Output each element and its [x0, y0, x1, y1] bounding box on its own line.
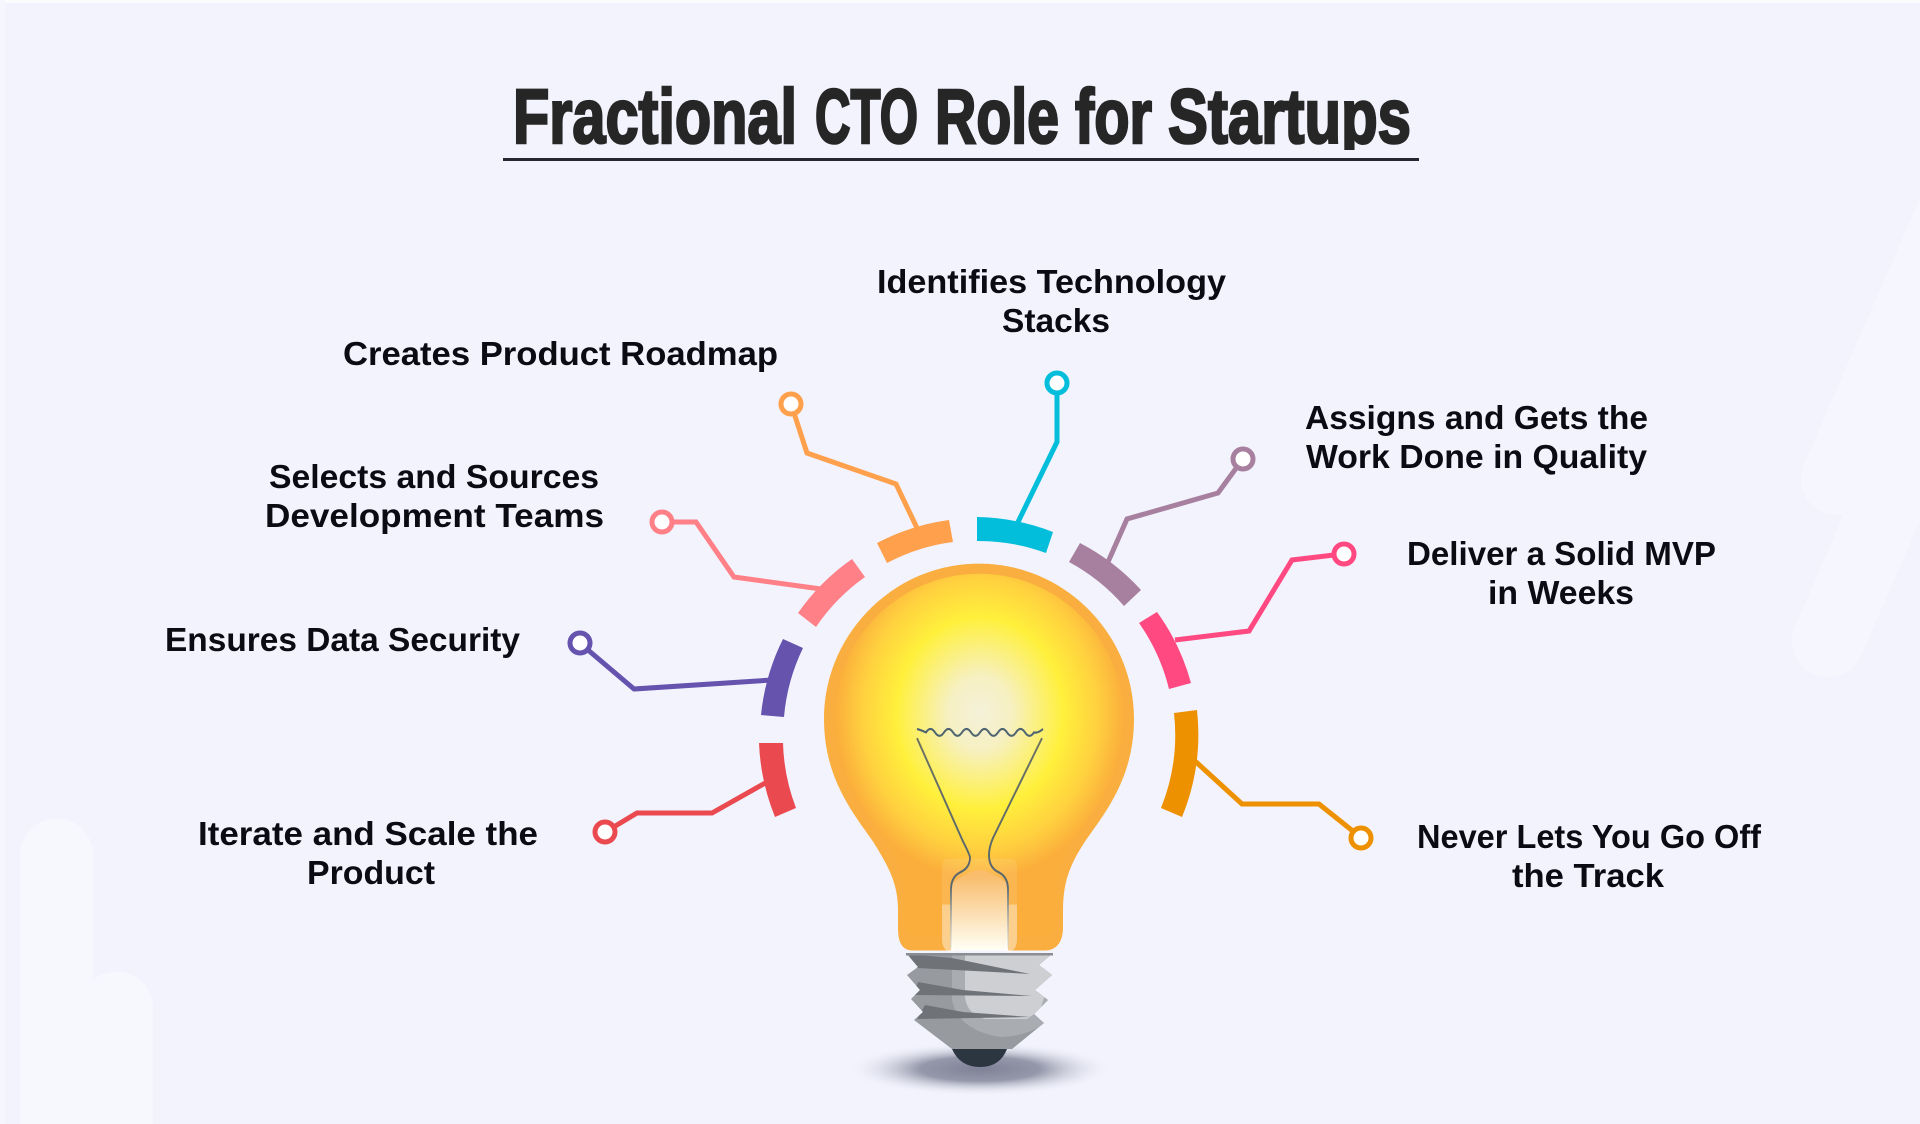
arc segment: [761, 639, 803, 717]
label: Selects and Sources Development Teams: Development Teams: [265, 497, 604, 534]
label: Deliver a Solid MVP in Weeks: [1407, 535, 1716, 611]
label: Never Lets You Go Off the Track: Never Lets You Go Off: [1417, 818, 1762, 855]
label: Never Lets You Go Off the Track: [1417, 818, 1762, 894]
node: [1351, 828, 1371, 848]
title: [516, 86, 1410, 150]
arc segment: [1139, 612, 1191, 689]
label: Deliver a Solid MVP in Weeks: Deliver a Solid MVP: [1407, 535, 1716, 572]
spoke: never off track: [1161, 710, 1371, 848]
spoke: data security: [570, 633, 803, 717]
node: [1047, 373, 1067, 393]
arc segment: [877, 520, 953, 563]
label: Ensures Data Security: Ensures Data Security: [165, 621, 521, 658]
label: Deliver a Solid MVP in Weeks: in Weeks: [1488, 574, 1634, 611]
label: Assigns and Gets the Work Done in Quality: Work Done in Quality: [1306, 438, 1648, 475]
label: Identifies Technology Stacks: [877, 263, 1227, 339]
spoke: solid MVP: [1139, 544, 1354, 689]
screw base: [906, 950, 1060, 1049]
title: CTO: [815, 74, 918, 160]
title underline: [503, 158, 1419, 161]
label: Selects and Sources Development Teams: [265, 458, 604, 534]
node: [1334, 544, 1354, 564]
title: Startups: [1168, 74, 1411, 160]
spoke: product roadmap: [781, 394, 953, 563]
support wires: [917, 738, 1042, 948]
connector: [1175, 555, 1334, 640]
bulb glass rim: [824, 564, 1134, 950]
arc segment: [977, 517, 1053, 553]
spoke: development teams: [652, 512, 865, 627]
node: [652, 512, 672, 532]
light bulb: [824, 564, 1134, 1096]
label: Never Lets You Go Off the Track: the Track: [1512, 857, 1665, 894]
label: Identifies Technology Stacks: Stacks: [1002, 302, 1110, 339]
connector: [1018, 393, 1057, 522]
arc segment: [1069, 543, 1141, 606]
bulb glow: [834, 574, 1124, 935]
spoke: technology stacks: [977, 373, 1067, 553]
base tip: [952, 1049, 1007, 1067]
spoke: quality: [1069, 449, 1253, 606]
title: for: [1075, 74, 1152, 160]
bulb glass: [824, 564, 1134, 953]
arc segment: [798, 559, 865, 627]
title: Fractional: [513, 74, 797, 160]
label: Identifies Technology Stacks: Identifies Technology: [877, 263, 1227, 300]
arc segment: [1161, 710, 1198, 817]
label: Selects and Sources Development Teams: Selects and Sources: [269, 458, 599, 495]
connector: [1195, 761, 1354, 832]
filament: [917, 729, 1043, 736]
label: Iterate and Scale the Product: Product: [307, 854, 435, 891]
label: Creates Product Roadmap: Creates Product Roadmap: [343, 335, 778, 372]
label: Iterate and Scale the Product: [198, 815, 538, 891]
connector: [672, 522, 821, 589]
node: [595, 822, 615, 842]
connector: [1108, 467, 1237, 562]
label: Assigns and Gets the Work Done in Quality: Assigns and Gets the: [1305, 399, 1648, 436]
node: [781, 394, 801, 414]
connector: [794, 413, 917, 528]
bulb shadow: [846, 1042, 1114, 1096]
label: Assigns and Gets the Work Done in Quality: [1305, 399, 1648, 475]
node: [570, 633, 590, 653]
glass stem: [942, 859, 1017, 953]
connector: [588, 650, 772, 689]
title: Role: [935, 74, 1059, 160]
connector: [612, 782, 767, 828]
spoke: iterate and scale: [595, 743, 796, 842]
background decorative bars, bottom left: [20, 818, 153, 1124]
background decorative bars, right: [1828, 105, 1920, 641]
node: [1233, 449, 1253, 469]
label: Iterate and Scale the Product: Iterate and Scale the: [198, 815, 538, 852]
arc segment: [759, 743, 796, 817]
